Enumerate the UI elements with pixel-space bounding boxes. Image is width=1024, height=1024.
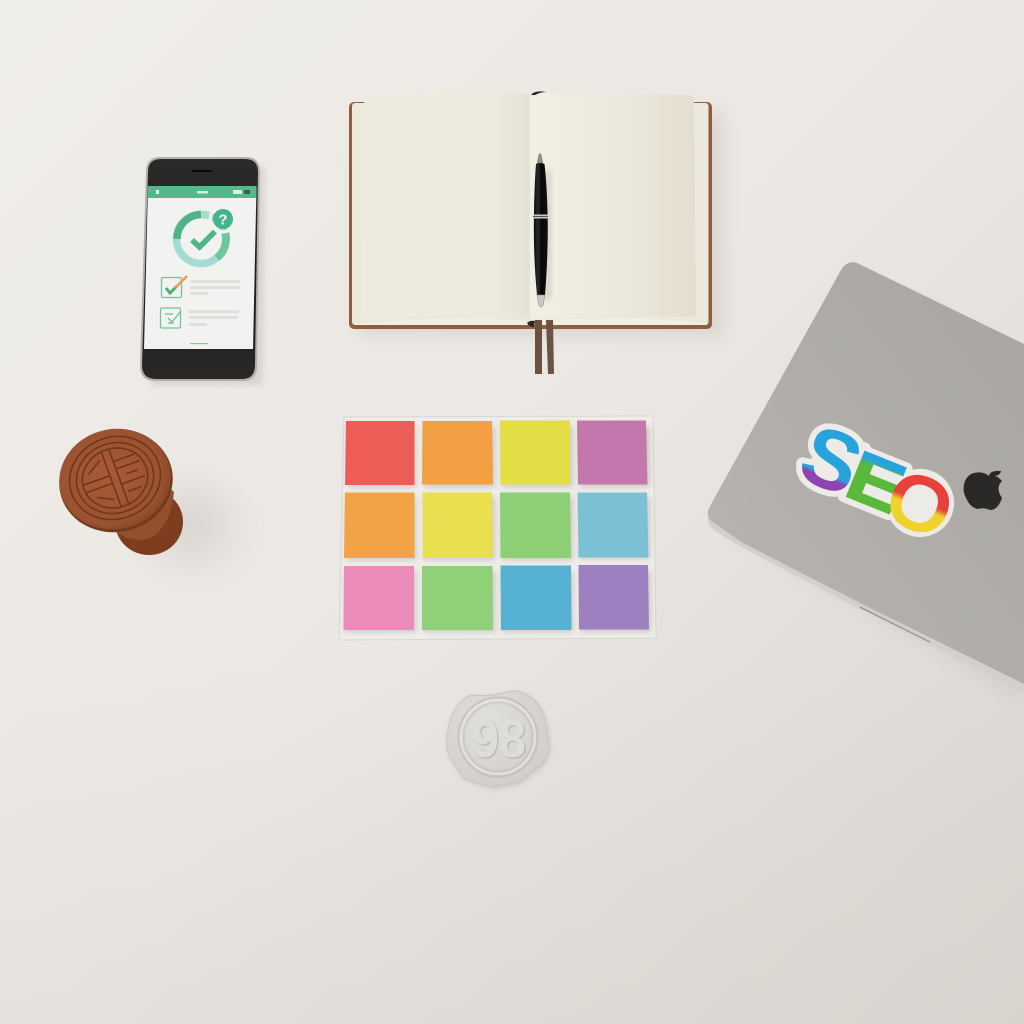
note: pink (344, 566, 414, 630)
note: green two (422, 566, 493, 630)
letter E: E (837, 436, 916, 528)
note: blue (500, 566, 572, 630)
sticker backing (788, 406, 966, 551)
backing sheet (339, 416, 656, 640)
sticky note board (339, 416, 656, 640)
phone body (140, 157, 260, 381)
note: yellow (500, 420, 570, 484)
checklist item one (162, 276, 240, 298)
note: sky (578, 492, 648, 558)
hinge notch (860, 607, 930, 642)
seal body (447, 691, 549, 787)
page bottom edge (355, 318, 706, 325)
laptop base edge (708, 505, 1024, 692)
note shadows (345, 426, 651, 632)
phone screen (144, 186, 256, 349)
note: orange two (344, 492, 414, 558)
apple logo (964, 471, 1002, 510)
check mark (192, 232, 215, 247)
note: purple (578, 565, 649, 630)
seal rings (458, 698, 538, 776)
pen (533, 153, 551, 307)
question badge (213, 209, 233, 229)
wax seal (447, 691, 550, 789)
stamp neck (108, 470, 174, 540)
wooden stamp (50, 418, 232, 561)
question badge: ? (218, 212, 228, 228)
stamp engraving (58, 424, 172, 532)
letter S: S (788, 406, 875, 514)
checklist item two (160, 308, 239, 328)
notebook cover (349, 102, 712, 329)
note: green (500, 492, 571, 558)
ribbon markers (527, 320, 554, 374)
app header bar (148, 186, 256, 198)
stamp head (50, 419, 182, 543)
note: orange (422, 421, 493, 484)
notebook (349, 91, 724, 374)
laptop (708, 262, 1024, 700)
notebook page stack (352, 103, 708, 325)
note: red (345, 421, 414, 485)
seal monogram: 98 (473, 711, 527, 769)
top bookmark loop (531, 91, 546, 95)
seal monogram: 98 (472, 710, 526, 768)
sticker backing: S (788, 406, 875, 514)
note: yellow two (422, 492, 493, 558)
progress ring (176, 206, 236, 264)
letter O: O (875, 455, 963, 554)
SEO sticker (787, 406, 969, 554)
note: mauve (577, 420, 648, 484)
laptop lid (708, 262, 1024, 684)
phone (140, 157, 265, 385)
right page (530, 93, 696, 319)
stamp base disc (115, 489, 183, 555)
left page (363, 91, 530, 319)
